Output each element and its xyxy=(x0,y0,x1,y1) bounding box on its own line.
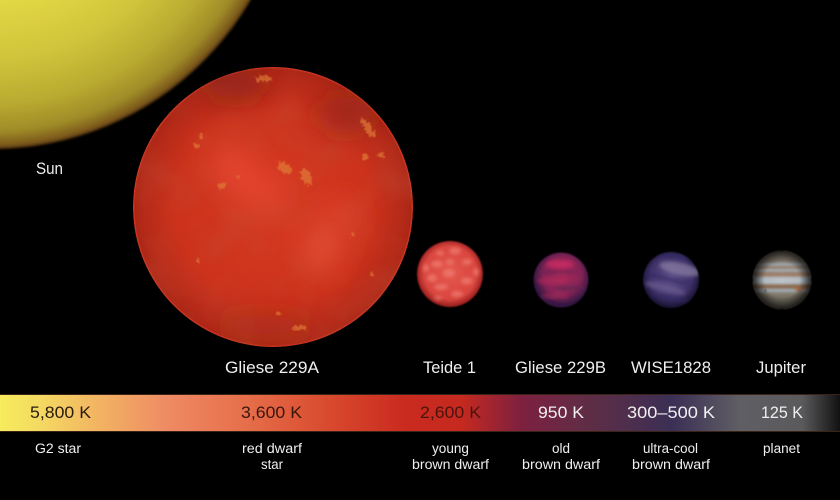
temperature labels xyxy=(30,404,803,422)
temperature labels: 2,600 K xyxy=(420,404,481,422)
icon: Sun xyxy=(0,0,291,149)
classification labels: ultra-cool xyxy=(643,441,698,456)
classification labels: young xyxy=(432,441,469,456)
temperature labels: 3,600 K xyxy=(241,404,302,422)
icon: WISE1828 xyxy=(642,252,702,308)
icon: Jupiter xyxy=(750,250,814,310)
icon: Teide 1 xyxy=(417,241,483,307)
heading: object names: WISE1828 xyxy=(631,359,711,377)
heading: object names: Jupiter xyxy=(756,359,807,377)
temperature labels: 300–500 K xyxy=(627,404,715,422)
heading: object names: Gliese 229A xyxy=(225,359,319,377)
classification labels: planet xyxy=(763,441,800,456)
classification labels: star xyxy=(261,457,283,472)
classification labels: brown dwarf xyxy=(522,457,600,472)
classification labels: red dwarf xyxy=(242,441,302,456)
classification labels: old xyxy=(552,441,570,456)
heading: object names xyxy=(225,359,807,377)
temperature labels: 125 K xyxy=(761,404,803,422)
classification labels: brown dwarf xyxy=(632,457,710,472)
icon: Gliese 229B xyxy=(534,252,588,308)
classification labels: brown dwarf xyxy=(412,457,489,472)
label: Sun: Sun xyxy=(36,160,63,178)
temperature labels: 5,800 K xyxy=(30,404,91,422)
icon: Gliese 229A red dwarf xyxy=(133,67,413,347)
temperature gradient bar xyxy=(0,394,840,432)
temperature labels: 950 K xyxy=(538,404,584,422)
classification labels xyxy=(35,441,800,472)
classification labels: G2 star xyxy=(35,441,82,456)
heading: object names: Gliese 229B xyxy=(515,359,606,377)
heading: object names: Teide 1 xyxy=(423,359,476,377)
